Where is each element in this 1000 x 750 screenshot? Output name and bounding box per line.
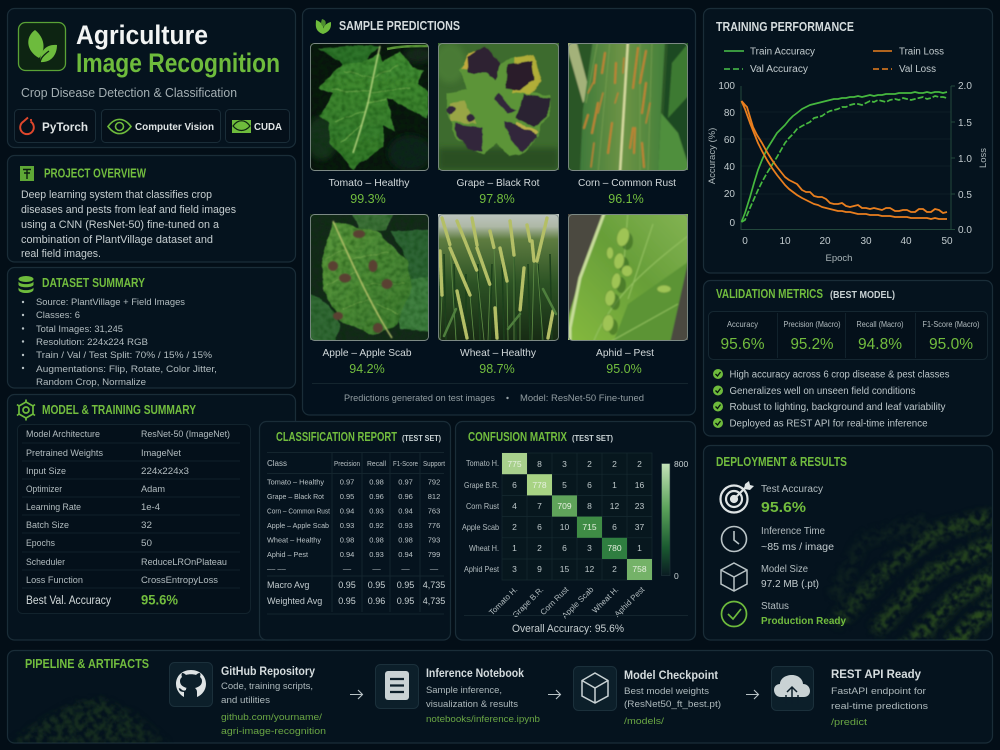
confusion matrix grid: 7 — [537, 501, 542, 511]
chart legend: Train Accuracy — [750, 46, 815, 58]
metrics tiles: Recall (Macro) — [856, 319, 904, 329]
dataset bullet list: Augmentations: Flip, Rotate, Color Jitter, — [36, 364, 217, 375]
badge: Computer Vision: Computer Vision — [135, 121, 214, 133]
classification table: 0.94 — [340, 550, 354, 559]
dataset bullet list: Total Images: 31,245 — [36, 324, 123, 335]
confusion column labels: Apple Scab — [560, 585, 596, 620]
image: corn common rust leaf — [565, 40, 691, 173]
heading: pipeline and artifacts: PIPELINE & ARTIFACTS — [25, 657, 149, 671]
confusion matrix grid: 2 — [612, 564, 617, 574]
predictions footnote: Predictions generated on test images — [344, 393, 495, 404]
overview text: diseases and pests from leaf and field images — [21, 204, 236, 216]
metrics tiles: 95.2% — [790, 336, 834, 353]
classification table: 776 — [428, 521, 440, 530]
x axis labels: 30 — [860, 236, 872, 247]
classification table: Precision — [334, 461, 360, 468]
step: REST API ready: FastAPI endpoint for — [831, 686, 926, 697]
right axis labels — [958, 81, 972, 236]
step: GitHub repository: and utilities — [221, 695, 270, 706]
classification table: Recall — [367, 461, 386, 468]
classification table: 812 — [428, 492, 440, 501]
badge: CUDA: CUDA — [254, 121, 282, 133]
dataset bullet list: Train / Val / Test Split: 70% / 15% / 15% — [36, 350, 213, 361]
axis titles — [707, 128, 989, 264]
model parameter table: CrossEntropyLoss — [141, 575, 218, 586]
confusion matrix grid: 1 — [637, 543, 642, 553]
confusion matrix grid: 758 — [632, 564, 647, 574]
heading: deployment and results: DEPLOYMENT & RESULTS — [716, 455, 847, 469]
panel: deployment and results — [704, 446, 995, 652]
confusion matrix grid: 10 — [560, 522, 569, 532]
panel: sample predictions — [302, 8, 696, 415]
icon: cloud upload — [772, 666, 814, 710]
confusion column labels: Grape B.R. — [511, 585, 545, 620]
metrics tiles — [708, 312, 988, 360]
background: tree rows — [836, 518, 995, 652]
classification table: Apple – Apple Scab — [267, 521, 329, 530]
image: grape black rot leaf — [434, 43, 559, 170]
left axis labels: 20 — [724, 189, 735, 200]
classification table: 0.95 — [338, 596, 356, 606]
prediction captions row 1 — [328, 177, 676, 206]
classification table: 4,735 — [423, 596, 445, 606]
model parameter table: Loss Function — [26, 575, 83, 586]
metric: inference time: Inference Time — [761, 526, 825, 537]
icon: database — [18, 276, 34, 293]
model parameter table: Pretrained Weights — [26, 448, 103, 459]
classification table: F1-Score — [393, 461, 418, 468]
metrics tiles: 95.6% — [720, 336, 764, 353]
line chart: accuracy and loss — [707, 81, 989, 264]
classification table: Wheat – Healthy — [267, 536, 321, 544]
model parameter table: 32 — [141, 520, 152, 531]
confusion column labels: Corn Rust — [539, 585, 571, 617]
heading: validation metrics: VALIDATION METRICS — [716, 287, 823, 301]
prediction captions row 1: Corn – Common Rust — [578, 177, 676, 189]
predictions footnote: Model: ResNet-50 Fine-tuned — [520, 393, 644, 404]
validation checklist: High accuracy across 6 crop disease & pest classes — [730, 370, 950, 380]
left axis labels — [718, 81, 735, 229]
prediction captions row 1: 96.1% — [608, 192, 644, 206]
dataset bullet list: Source: PlantVillage + Field Images — [36, 297, 185, 308]
image: aphid pest on leaf — [565, 211, 691, 343]
step: REST API ready: REST API Ready — [831, 669, 922, 681]
right axis labels: 0.0 — [958, 225, 972, 236]
classification table: Macro Avg — [267, 580, 309, 590]
classification table: 0.94 — [340, 506, 354, 516]
overview text: Deep learning system that classifies crop — [21, 189, 212, 201]
confusion matrix grid: 6 — [537, 522, 542, 532]
step: REST API ready — [772, 666, 928, 728]
classification table: 0.96 — [369, 492, 384, 501]
model parameter table: Learning Rate — [26, 502, 81, 513]
chart legend: Val Accuracy — [750, 64, 808, 75]
step: inference notebook: Sample inference, — [426, 685, 502, 696]
icon: sprout — [316, 19, 331, 34]
classification table: 0.98 — [369, 478, 384, 486]
arrow — [548, 690, 560, 699]
step: GitHub repository: github.com/yourname/ — [221, 712, 322, 723]
axis titles: Loss — [978, 148, 989, 168]
metric: model size — [721, 563, 819, 591]
confusion matrix grid: 775 — [507, 459, 522, 469]
classification table: 0.94 — [398, 506, 413, 516]
classification table: –– — [372, 564, 381, 573]
x axis labels: 0 — [742, 236, 748, 247]
right axis labels: 0.5 — [958, 190, 972, 201]
confusion column labels: Wheat H. — [590, 585, 620, 615]
badge: Computer Vision — [102, 110, 220, 142]
axis titles: Epoch — [826, 253, 852, 264]
model parameter table: Scheduler — [26, 557, 65, 568]
classification table: Grape – Black Rot — [267, 492, 325, 501]
confusion matrix grid: 2 — [537, 543, 542, 553]
x axis labels: 20 — [819, 236, 831, 247]
confusion matrix grid: 12 — [585, 564, 594, 574]
x axis labels: 40 — [900, 236, 912, 247]
metrics tiles: F1-Score (Macro) — [922, 319, 980, 329]
dataset bullet list — [22, 297, 217, 388]
metric: status: Status — [761, 601, 789, 612]
confusion matrix grid: 23 — [635, 501, 644, 511]
left axis labels: 80 — [724, 108, 735, 119]
confusion matrix grid: 12 — [610, 501, 619, 511]
step: REST API ready: real-time predictions — [831, 701, 928, 712]
colour scale — [662, 459, 688, 581]
confusion column labels — [487, 585, 647, 620]
metric: model size: 97.2 MB (.pt) — [761, 579, 819, 590]
classification table: 763 — [428, 506, 440, 516]
classification table: Tomato – Healthy — [267, 478, 324, 486]
panel: validation metrics — [704, 280, 992, 436]
classification table: 4,735 — [423, 580, 445, 590]
metric: status — [722, 601, 846, 627]
step: REST API ready: /predict — [831, 717, 867, 728]
dataset bullet list: Resolution: 224x224 RGB — [36, 337, 148, 348]
left axis labels: 60 — [724, 135, 735, 146]
classification table: Weighted Avg — [267, 596, 322, 606]
step: model checkpoint: Best model weights — [624, 686, 709, 697]
classification table: –– — [401, 564, 410, 573]
prediction captions row 2: Wheat – Healthy — [460, 347, 537, 359]
classification table: 799 — [428, 550, 440, 559]
image: tomato healthy leaf — [306, 43, 432, 171]
overview text: combination of PlantVillage dataset and — [21, 234, 213, 246]
prediction captions row 2: 95.0% — [606, 362, 642, 376]
metric: test accuracy: Test Accuracy — [761, 484, 823, 495]
heading: validation metrics: (BEST MODEL) — [830, 290, 895, 301]
step: model checkpoint: Model Checkpoint — [624, 670, 718, 682]
confusion matrix grid: 5 — [562, 480, 567, 490]
badge: PyTorch — [14, 110, 96, 142]
validation checklist — [713, 369, 950, 430]
confusion row labels: Wheat H. — [469, 543, 499, 553]
model parameter table: Optimizer — [26, 484, 62, 495]
classification table: –– –– — [267, 564, 287, 573]
classification table: 0.92 — [369, 521, 384, 530]
heading: dataset summary: DATASET SUMMARY — [42, 276, 146, 290]
validation checklist: Robust to lighting, background and leaf variability — [730, 402, 946, 413]
left axis labels: 0 — [729, 218, 735, 229]
metrics tiles: 94.8% — [858, 336, 902, 353]
model parameter table: 50 — [141, 538, 152, 549]
step: model checkpoint: (ResNet50_ft_best.pt) — [624, 699, 721, 710]
confusion matrix grid: 6 — [587, 480, 592, 490]
right axis labels: 1.0 — [958, 154, 972, 165]
icon: notebook — [376, 664, 418, 708]
classification table: Aphid – Pest — [267, 550, 309, 559]
confusion matrix grid: 780 — [607, 543, 622, 553]
classification table: 0.93 — [340, 521, 354, 530]
validation checklist: Deployed as REST API for real-time inference — [730, 418, 928, 430]
classification table: 0.97 — [398, 478, 413, 486]
classification table: 0.98 — [398, 536, 413, 544]
overview text: real field images. — [21, 248, 101, 260]
badge: CUDA — [226, 110, 290, 142]
confusion matrix grid: 4 — [512, 501, 517, 511]
model parameter table: ImageNet — [141, 448, 181, 459]
image: apple scab leaf — [306, 210, 432, 344]
colour scale: 0 — [674, 571, 679, 581]
confusion matrix grid: 1 — [512, 543, 517, 553]
model parameter table — [18, 424, 250, 614]
confusion matrix grid — [502, 453, 652, 580]
confusion matrix grid: 16 — [635, 480, 644, 490]
confusion row labels: Tomato H. — [466, 458, 499, 468]
dataset bullet list: Random Crop, Normalize — [36, 377, 146, 388]
prediction captions row 1: Grape – Black Rot — [456, 177, 540, 189]
step: GitHub repository — [170, 662, 326, 737]
panel: model and training summary — [8, 394, 296, 640]
heading: confusion matrix: (TEST SET) — [572, 433, 613, 443]
prediction captions row 2: 98.7% — [479, 362, 515, 376]
classification table: –– — [430, 564, 439, 573]
panel: project overview — [8, 156, 296, 262]
model parameter table: Epochs — [26, 538, 55, 549]
title: Image Recognition — [76, 48, 280, 78]
chart legend — [724, 46, 944, 75]
classification table: 0.95 — [397, 580, 414, 590]
validation checklist: Generalizes well on unseen field conditions — [730, 386, 916, 397]
confusion matrix grid: 8 — [587, 501, 592, 511]
step: inference notebook: Inference Notebook — [426, 668, 525, 680]
confusion matrix grid: 2 — [587, 459, 592, 469]
classification table: 0.93 — [369, 506, 384, 516]
metrics tiles: 95.0% — [929, 336, 973, 353]
panel: confusion matrix — [456, 422, 696, 640]
prediction captions row 1: 97.8% — [479, 192, 515, 206]
dataset bullet list: Classes: 6 — [36, 310, 80, 321]
confusion matrix grid: 3 — [512, 564, 517, 574]
metric: inference time — [722, 526, 834, 553]
confusion matrix grid: 8 — [537, 459, 542, 469]
confusion matrix grid: 9 — [537, 564, 542, 574]
step: GitHub repository: agri-image-recognition — [221, 726, 326, 737]
confusion matrix grid: 2 — [612, 459, 617, 469]
confusion matrix grid: 6 — [612, 522, 617, 532]
confusion matrix grid: 715 — [582, 522, 597, 532]
axis titles: Accuracy (%) — [707, 128, 718, 184]
heading: classification report: CLASSIFICATION REPORT — [276, 430, 397, 444]
icon: gear — [17, 400, 35, 420]
classification table: 0.96 — [398, 492, 413, 501]
confusion matrix grid: 3 — [562, 459, 567, 469]
title: Agriculture — [76, 20, 208, 50]
classification table — [267, 452, 445, 614]
confusion row labels: Apple Scab — [462, 522, 499, 532]
metrics tiles: Accuracy — [727, 319, 759, 329]
classification table: Class — [267, 459, 287, 468]
confusion matrix grid: 778 — [532, 480, 547, 490]
model parameter table: ReduceLROnPlateau — [141, 557, 227, 568]
chart legend: Train Loss — [899, 46, 944, 58]
prediction captions row 1: Tomato – Healthy — [328, 177, 410, 189]
classification table: 0.93 — [369, 550, 384, 559]
metric: status: Production Ready — [761, 615, 846, 627]
panel: header — [8, 8, 296, 148]
confusion row labels: Aphid Pest — [464, 564, 500, 574]
left axis labels: 100 — [718, 81, 735, 92]
image: healthy wheat field — [438, 214, 559, 340]
x axis labels: 50 — [941, 236, 953, 247]
metric: test accuracy — [720, 481, 823, 516]
model parameter table: Best Val. Accuracy — [26, 595, 111, 607]
classification table: 0.98 — [369, 536, 384, 544]
model parameter table: Batch Size — [26, 520, 69, 531]
overview text — [21, 189, 236, 260]
metrics tiles: Precision (Macro) — [784, 319, 841, 329]
classification table: –– — [343, 564, 352, 573]
classification table: 0.96 — [368, 596, 385, 606]
model parameter table: Model Architecture — [26, 429, 100, 440]
step: inference notebook: notebooks/inference.ipynb — [426, 714, 540, 725]
classification table: 0.97 — [340, 478, 354, 486]
confusion matrix grid: 6 — [512, 480, 517, 490]
panel: dataset summary — [8, 268, 296, 388]
step: model checkpoint: /models/ — [624, 716, 664, 727]
confusion matrix grid: 37 — [635, 522, 644, 532]
metric: test accuracy: 95.6% — [761, 499, 806, 516]
predictions footnote — [344, 393, 644, 404]
classification table: 0.93 — [398, 521, 413, 530]
prediction captions row 1: 99.3% — [350, 192, 386, 206]
badge: PyTorch: PyTorch — [42, 120, 88, 134]
prediction captions row 2: Aphid – Pest — [596, 347, 654, 359]
confusion matrix grid: 709 — [557, 501, 572, 511]
overall accuracy: Overall Accuracy: 95.6% — [512, 623, 624, 635]
overview text: using a CNN (ResNet-50) fine-tuned on a — [21, 219, 220, 231]
confusion row labels — [462, 458, 500, 574]
classification table: Support — [423, 461, 445, 468]
confusion matrix grid: 1 — [612, 480, 617, 490]
right axis labels: 1.5 — [958, 118, 972, 129]
confusion matrix grid: 2 — [512, 522, 517, 532]
icon: overview — [20, 166, 34, 181]
confusion column labels: Tomato H. — [487, 585, 519, 617]
model parameter table: 1e-4 — [141, 502, 160, 513]
heading: project overview: PROJECT OVERVIEW — [44, 166, 146, 180]
heading: confusion matrix: CONFUSION MATRIX — [468, 430, 568, 444]
icon: GitHub — [170, 662, 212, 706]
classification table: 0.95 — [368, 580, 385, 590]
heading: sample predictions: SAMPLE PREDICTIONS — [339, 19, 460, 33]
model parameter table: Input Size — [26, 466, 66, 477]
classification table: Corn – Common Rust — [267, 506, 331, 516]
subtitle: Crop Disease Detection & Classification — [21, 86, 237, 100]
icon: logo leaves — [18, 22, 66, 70]
classification table: 793 — [428, 536, 440, 544]
step: GitHub repository: Code, training scripts, — [221, 681, 313, 692]
classification table: 0.98 — [340, 536, 354, 544]
classification table: 0.94 — [398, 550, 413, 559]
step: model checkpoint — [574, 666, 721, 727]
step: inference notebook — [376, 664, 540, 725]
step: inference notebook: visualization & results — [426, 699, 518, 710]
model parameter table: 224x224x3 — [141, 466, 189, 477]
confusion row labels: Grape B.R. — [464, 480, 499, 490]
model parameter table: 95.6% — [141, 592, 179, 608]
arrow — [350, 690, 362, 699]
step: GitHub repository: GitHub Repository — [221, 666, 316, 678]
prediction captions row 2: 94.2% — [349, 362, 385, 376]
colour scale: 800 — [674, 459, 688, 469]
panel: training performance — [704, 8, 992, 273]
x axis labels: 10 — [779, 236, 791, 247]
panel: classification report — [260, 422, 450, 640]
model parameter table: ResNet-50 (ImageNet) — [141, 429, 230, 440]
heading: training performance: TRAINING PERFORMANCE — [716, 20, 854, 34]
classification table: 0.95 — [338, 580, 356, 590]
metric: inference time: ~85 ms / image — [761, 541, 834, 553]
heading: model and training summary: MODEL & TRAINING SUMMARY — [42, 403, 197, 417]
arrow — [746, 690, 758, 699]
chart legend: Val Loss — [899, 64, 936, 75]
x axis labels — [742, 236, 953, 247]
confusion matrix grid: 6 — [562, 543, 567, 553]
classification table: 0.95 — [397, 596, 414, 606]
prediction captions row 2: Apple – Apple Scab — [322, 347, 412, 359]
heading: classification report: (TEST SET) — [402, 433, 441, 443]
panel: pipeline and artifacts — [8, 650, 992, 743]
model parameter table: Adam — [141, 484, 165, 495]
confusion matrix grid: 15 — [560, 564, 569, 574]
title — [76, 20, 280, 78]
prediction captions row 2 — [322, 347, 654, 376]
confusion column labels: Aphid Pest — [613, 585, 647, 619]
background: tree canopy — [18, 698, 160, 742]
left axis labels: 40 — [724, 162, 735, 173]
confusion row labels: Corn Rust — [466, 501, 500, 511]
icon: cube — [574, 666, 616, 710]
right axis labels: 2.0 — [958, 81, 972, 92]
classification table: 792 — [428, 478, 440, 486]
confusion matrix grid: 2 — [637, 459, 642, 469]
confusion matrix grid: 3 — [587, 543, 592, 553]
metric: model size: Model Size — [761, 564, 808, 575]
classification table: 0.95 — [340, 492, 354, 501]
